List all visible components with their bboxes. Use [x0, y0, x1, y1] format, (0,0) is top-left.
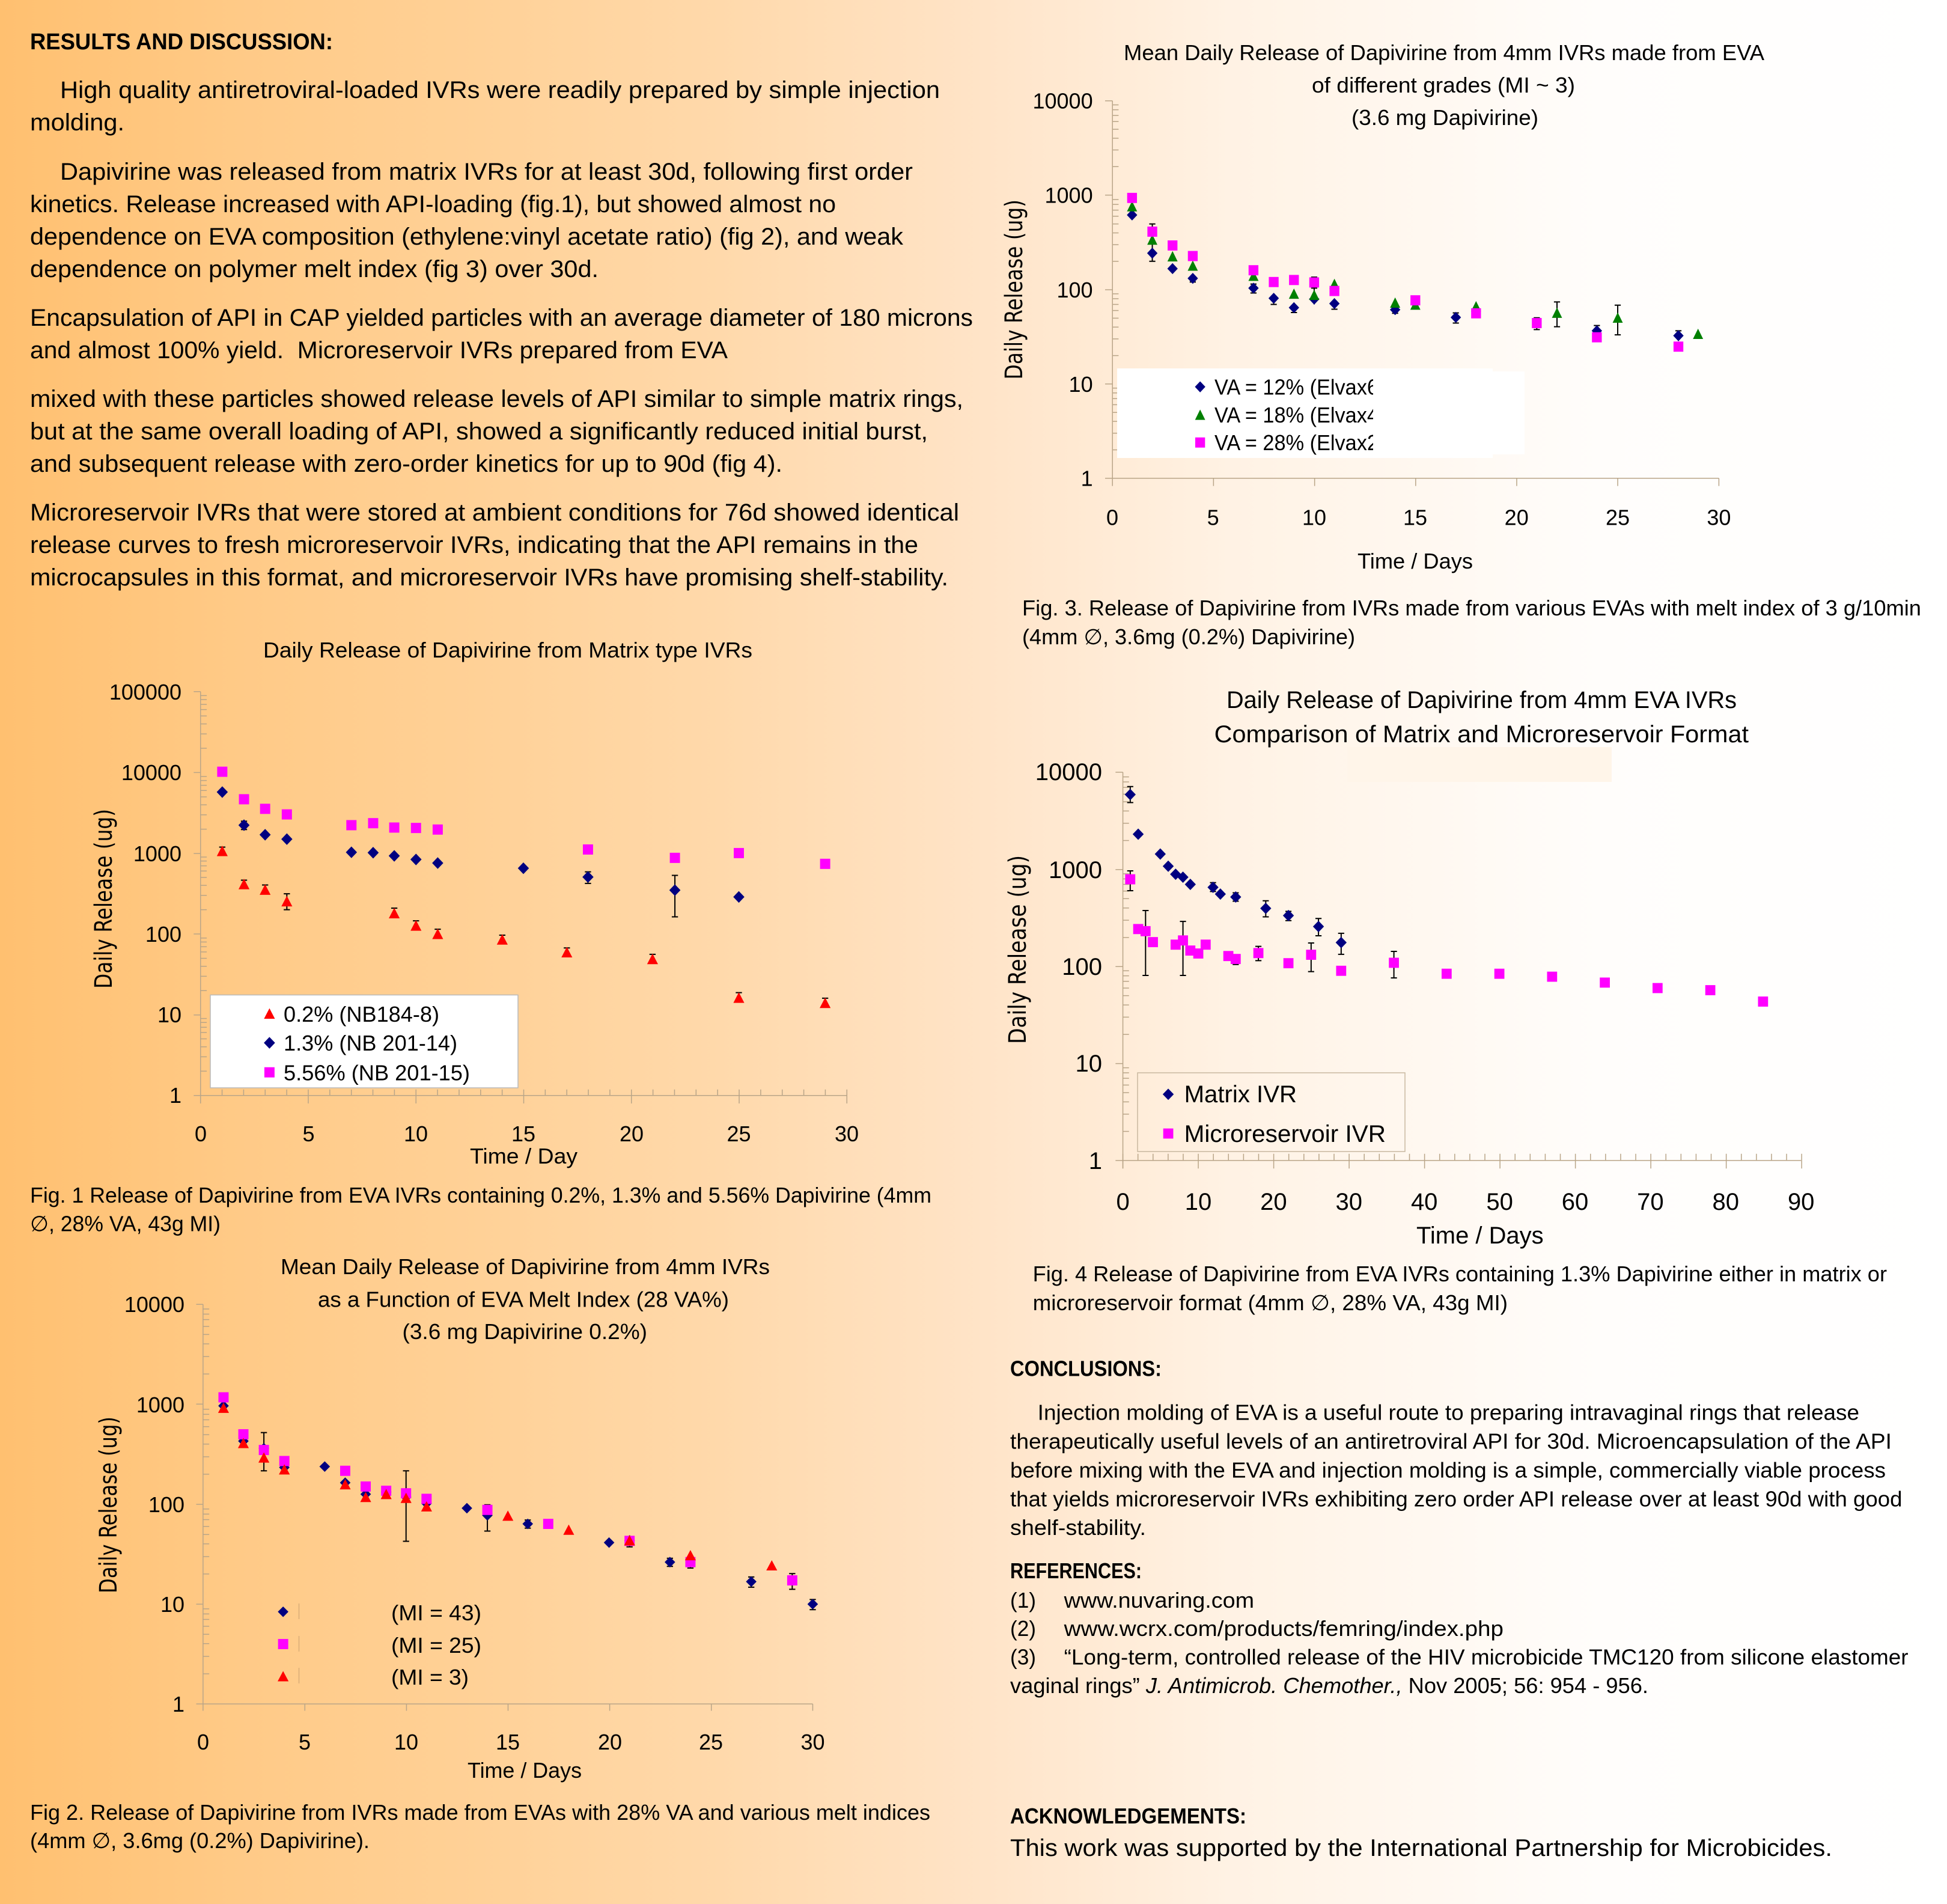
caption: figure 4: Fig. 4 Release of Dapivirine from EVA IVRs containing 1.3% Dapivirine either in matrix or: [1033, 1262, 1887, 1286]
x axis tick labels: 50: [1486, 1189, 1513, 1215]
legend: 0.2% (NB184-8): [284, 1002, 439, 1027]
chart title: Mean Daily Release of Dapivirine from 4mm IVRs: [281, 1254, 770, 1279]
x axis label: Time / Days: [468, 1758, 582, 1783]
x axis tick labels: 40: [1411, 1189, 1437, 1215]
text block: results and discussion body: [30, 77, 973, 591]
x axis tick labels: 0: [1106, 505, 1118, 530]
legend: Microreservoir IVR: [1184, 1121, 1386, 1147]
chart title: Mean Daily Release of Dapivirine from 4mm IVRs made from EVA: [1124, 40, 1764, 65]
legend: [210, 995, 518, 1088]
y axis tick labels: 1000: [133, 841, 181, 866]
text block: conclusions: before mixing with the EVA and injection molding is a simple, commercially viable process: [1010, 1458, 1886, 1482]
x axis tick labels: 5: [302, 1121, 315, 1146]
text block: results and discussion body: dependence on polymer melt index (fig 3) over 30d.: [30, 256, 599, 282]
text block: results and discussion body: release curves to fresh microreservoir IVRs, indicating that the API remains in the: [30, 532, 918, 558]
y axis tick labels: 100: [1062, 954, 1102, 980]
x axis tick labels: 15: [496, 1730, 520, 1754]
x axis tick labels: 0: [1116, 1189, 1130, 1215]
legend: clipped white panel: VA = 12% (Elvax6: [1214, 375, 1379, 399]
x axis tick labels: 60: [1562, 1189, 1588, 1215]
text block: conclusions: therapeutically useful levels of an antiretroviral API for 30d. Microencapsulation of the API: [1010, 1429, 1892, 1453]
x axis tick labels: 10: [404, 1121, 428, 1146]
text block: results and discussion body: molding.: [30, 109, 124, 136]
y axis tick labels: [1032, 89, 1093, 491]
y axis tick labels: 100: [148, 1492, 184, 1517]
text block: results and discussion body: mixed with these particles showed release levels of API similar to simple matrix rings,: [30, 386, 963, 412]
y axis tick labels: 10000: [1035, 759, 1102, 786]
caption: figure 1: [30, 1183, 931, 1236]
caption: figure 1: ∅, 28% VA, 43g MI): [30, 1212, 221, 1236]
x axis label: Time / Days: [1416, 1222, 1544, 1249]
y axis label: Daily Release (ug): [1001, 200, 1028, 380]
x axis tick labels: 20: [1505, 505, 1529, 530]
x axis tick labels: 15: [1403, 505, 1427, 530]
chart title: (3.6 mg Dapivirine): [1351, 105, 1538, 130]
caption: figure 2: (4mm ∅, 3.6mg (0.2%) Dapivirine).: [30, 1828, 370, 1853]
text block: results and discussion body: dependence on EVA composition (ethylene:vinyl acetate ratio) (fig 2), and weak: [30, 224, 904, 250]
text block: references list: (1): [1010, 1588, 1036, 1613]
y axis label: Daily Release (ug): [90, 809, 118, 989]
text block: references list: www.wcrx.com/products/femring/index.php: [1064, 1616, 1504, 1641]
x axis tick labels: 10: [1302, 505, 1326, 530]
text block: acknowledgement: This work was supported by the International Partnership for Microbicides.: [1010, 1835, 1832, 1861]
y axis tick labels: 10000: [121, 760, 181, 785]
y axis tick labels: 100: [145, 922, 181, 947]
data: series, error bars: [1127, 193, 1702, 352]
y axis tick labels: 1: [1089, 1148, 1102, 1174]
x axis tick labels: 5: [299, 1730, 311, 1754]
data: series, error bars: [218, 1392, 817, 1610]
y axis tick labels: 10000: [1032, 89, 1093, 114]
heading: conclusions: CONCLUSIONS:: [1010, 1356, 1162, 1381]
legend: 1.3% (NB 201-14): [284, 1031, 457, 1055]
caption: figure 3: Fig. 3. Release of Dapivirine from IVRs made from various EVAs with melt index of 3 g/10min: [1022, 596, 1921, 620]
y axis label: Daily Release (ug): [95, 1417, 123, 1593]
text block: references list: (3): [1010, 1645, 1036, 1670]
legend: Matrix IVR: [1184, 1081, 1297, 1108]
chart title: as a Function of EVA Melt Index (28 VA%): [318, 1287, 729, 1311]
x axis tick labels: [195, 1121, 859, 1146]
panel: figure 2 chart: [95, 1254, 825, 1783]
x axis tick labels: 90: [1788, 1189, 1814, 1215]
faint patch behind title: [1347, 747, 1612, 782]
x axis tick labels: 30: [835, 1121, 859, 1146]
x axis tick labels: 20: [1260, 1189, 1287, 1215]
y axis tick labels: 1: [169, 1083, 181, 1108]
text block: results and discussion body: kinetics. Release increased with API-loading (fig.1), but showed almost no: [30, 191, 836, 218]
legend: [278, 1600, 481, 1689]
y axis tick labels: 1: [172, 1692, 184, 1716]
caption: figure 4: [1033, 1262, 1887, 1315]
y axis tick labels: 10: [1076, 1051, 1102, 1077]
x axis tick labels: 80: [1713, 1189, 1739, 1215]
legend: clipped white panel: [1117, 368, 1525, 458]
panel: figure 4 chart: [1004, 687, 1814, 1249]
legend: (MI = 43): [391, 1600, 481, 1625]
text block: conclusions: shelf-stability.: [1010, 1515, 1146, 1540]
x axis tick labels: 20: [620, 1121, 644, 1146]
legend: 5.56% (NB 201-15): [284, 1060, 470, 1085]
chart title: [281, 1254, 770, 1344]
text block: results and discussion body: Microreservoir IVRs that were stored at ambient conditions for 76d showed identical: [30, 499, 959, 526]
axes and ticks: [1115, 772, 1802, 1168]
x axis tick labels: [197, 1730, 825, 1754]
x axis tick labels: 30: [800, 1730, 825, 1754]
text block: conclusions: [1010, 1400, 1903, 1540]
y axis tick labels: 10: [1069, 372, 1093, 397]
legend: (MI = 25): [391, 1633, 481, 1658]
data: series, error bars: [1125, 787, 1768, 1007]
x axis tick labels: 15: [511, 1121, 535, 1146]
x axis tick labels: 30: [1707, 505, 1731, 530]
heading: acknowledgements: ACKNOWLEDGEMENTS:: [1010, 1804, 1246, 1828]
y axis tick labels: 100000: [109, 680, 181, 704]
text block: results and discussion body: microcapsules in this format, and microreservoir IVRs have promising shelf-stability.: [30, 564, 948, 591]
text block: results and discussion body: and subsequent release with zero-order kinetics for up to 90d (fig 4).: [30, 451, 782, 477]
text block: references list: vaginal rings” J. Antimicrob. Chemother., Nov 2005; 56: 954 - 956.: [1010, 1673, 1648, 1698]
y axis tick labels: 10: [160, 1592, 184, 1617]
text block: results and discussion body: Encapsulation of API in CAP yielded particles with an average diameter of 180 microns: [30, 305, 973, 331]
x axis tick labels: 0: [195, 1121, 207, 1146]
x axis label: Time / Days: [1357, 549, 1473, 573]
caption: figure 1: Fig. 1 Release of Dapivirine from EVA IVRs containing 0.2%, 1.3% and 5.56% Dapivirine (4mm: [30, 1183, 931, 1207]
text block: references list: www.nuvaring.com: [1064, 1588, 1254, 1613]
y axis tick labels: 1: [1081, 466, 1093, 491]
caption: figure 2: [30, 1800, 930, 1853]
y axis tick labels: 10: [157, 1002, 181, 1027]
axes and ticks: [196, 1304, 812, 1710]
x axis tick labels: 0: [197, 1730, 209, 1754]
y axis label: Daily Release (ug): [1004, 855, 1032, 1044]
legend: (MI = 3): [391, 1665, 469, 1689]
chart title: (3.6 mg Dapivirine 0.2%): [403, 1319, 647, 1344]
y axis tick labels: 1000: [136, 1393, 184, 1417]
caption: figure 3: [1022, 596, 1921, 649]
y axis tick labels: [109, 680, 181, 1108]
heading: references: REFERENCES:: [1010, 1558, 1142, 1583]
data: series, error bars: [217, 767, 830, 1008]
text block: results and discussion body: and almost 100% yield. Microreservoir IVRs prepared from EVA: [30, 337, 728, 364]
text block: references list: [1010, 1588, 1909, 1698]
chart title: [1124, 40, 1764, 130]
x axis tick labels: 30: [1336, 1189, 1362, 1215]
legend: [1138, 1073, 1405, 1152]
text block: references list: “Long-term, controlled release of the HIV microbicide TMC120 from silicone elastomer: [1064, 1645, 1909, 1670]
y axis tick labels: [124, 1292, 184, 1716]
x axis tick labels: 20: [598, 1730, 622, 1754]
legend: clipped white panel: VA = 18% (Elvax4: [1214, 403, 1379, 427]
heading: results and discussion: RESULTS AND DISCUSSION:: [30, 29, 333, 55]
y axis tick labels: 1000: [1049, 857, 1102, 883]
text block: results and discussion body: Dapivirine was released from matrix IVRs for at least 30d, following first order: [60, 159, 913, 185]
x axis tick labels: 25: [699, 1730, 723, 1754]
y axis tick labels: [1035, 759, 1102, 1174]
chart title: [1214, 687, 1749, 748]
x axis tick labels: 10: [1185, 1189, 1211, 1215]
x axis tick labels: 25: [1606, 505, 1630, 530]
chart title: Daily Release of Dapivirine from 4mm EVA IVRs: [1226, 687, 1737, 713]
x axis label: Time / Day: [470, 1144, 577, 1168]
y axis tick labels: 1000: [1045, 183, 1093, 207]
legend: clipped white panel: VA = 28% (Elvax2: [1214, 430, 1379, 455]
axes and ticks: [1105, 101, 1719, 486]
chart title: of different grades (MI ~ 3): [1312, 73, 1575, 97]
caption: figure 3: (4mm ∅, 3.6mg (0.2%) Dapivirine): [1022, 624, 1355, 649]
chart title: Comparison of Matrix and Microreservoir Format: [1214, 721, 1749, 748]
x axis tick labels: [1106, 505, 1731, 530]
caption: figure 2: Fig 2. Release of Dapivirine from IVRs made from EVAs with 28% VA and various melt indices: [30, 1800, 930, 1825]
y axis tick labels: 100: [1057, 278, 1093, 302]
panel: figure 3 chart: [1001, 40, 1764, 573]
x axis tick labels: 5: [1207, 505, 1219, 530]
axes and ticks: [193, 692, 847, 1103]
text block: results and discussion body: but at the same overall loading of API, showed a significantly reduced initial burst,: [30, 418, 928, 445]
text block: results and discussion body: High quality antiretroviral-loaded IVRs were readily prepared by simple injection: [60, 77, 940, 103]
x axis tick labels: 70: [1637, 1189, 1664, 1215]
x axis tick labels: 25: [727, 1121, 751, 1146]
y axis tick labels: 10000: [124, 1292, 184, 1317]
text block: conclusions: Injection molding of EVA is a useful route to preparing intravaginal rings that release: [1038, 1400, 1859, 1424]
text block: references list: (2): [1010, 1616, 1036, 1641]
caption: figure 4: microreservoir format (4mm ∅, 28% VA, 43g MI): [1033, 1290, 1508, 1315]
chart title: Daily Release of Dapivirine from Matrix type IVRs: [263, 638, 752, 662]
x axis tick labels: [1116, 1189, 1814, 1215]
text block: conclusions: that yields microreservoir IVRs exhibiting zero order API release over at least 90d with good: [1010, 1487, 1903, 1511]
x axis tick labels: 10: [394, 1730, 418, 1754]
panel: figure 1 chart: [90, 638, 859, 1168]
